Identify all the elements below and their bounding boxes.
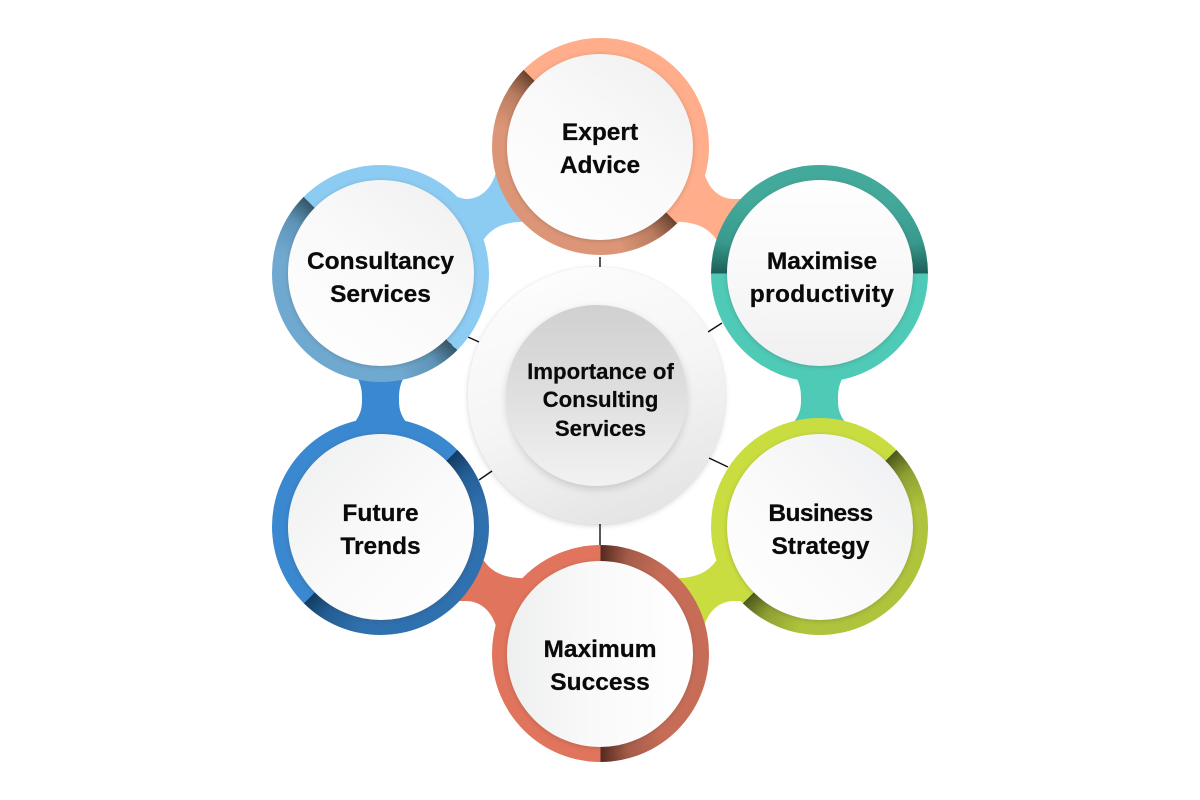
node: expert advice: Advice <box>560 152 640 178</box>
tick marks linking hub to rings <box>468 257 728 546</box>
node: future trends: Future <box>342 500 419 526</box>
node: maximum success <box>492 545 708 762</box>
center hub: importance of consulting services <box>468 267 725 524</box>
connector: future trends to consultancy services <box>350 372 411 428</box>
connector: business strategy to maximum success <box>668 550 748 630</box>
center hub: importance of consulting services: Importance of <box>527 359 674 384</box>
node: expert advice <box>492 38 708 255</box>
node: future trends <box>272 418 489 635</box>
node: maximise productivity: Maximise <box>767 248 877 274</box>
node: maximise productivity <box>711 164 928 382</box>
center hub: importance of consulting services: Consulting <box>543 387 658 412</box>
center hub: importance of consulting services: Services <box>555 416 646 441</box>
node: business strategy: Strategy <box>771 532 870 560</box>
node: maximum success: Maximum <box>543 636 656 663</box>
connector: consultancy services to expert advice <box>445 172 532 250</box>
node: consultancy services <box>272 164 489 382</box>
node: expert advice: Expert <box>562 118 638 146</box>
node: maximum success: Success <box>550 669 650 696</box>
node: consultancy services: Services <box>330 280 431 308</box>
node: business strategy <box>711 418 928 635</box>
connector: maximise productivity to business strategy <box>789 372 850 428</box>
node: maximise productivity: productivity <box>750 280 894 308</box>
node: future trends: Trends <box>340 532 421 560</box>
node: business strategy: Business <box>768 500 873 526</box>
connector: expert advice to maximise productivity <box>668 172 748 250</box>
node: consultancy services: Consultancy <box>307 248 454 274</box>
connector: maximum success to future trends <box>452 550 532 630</box>
